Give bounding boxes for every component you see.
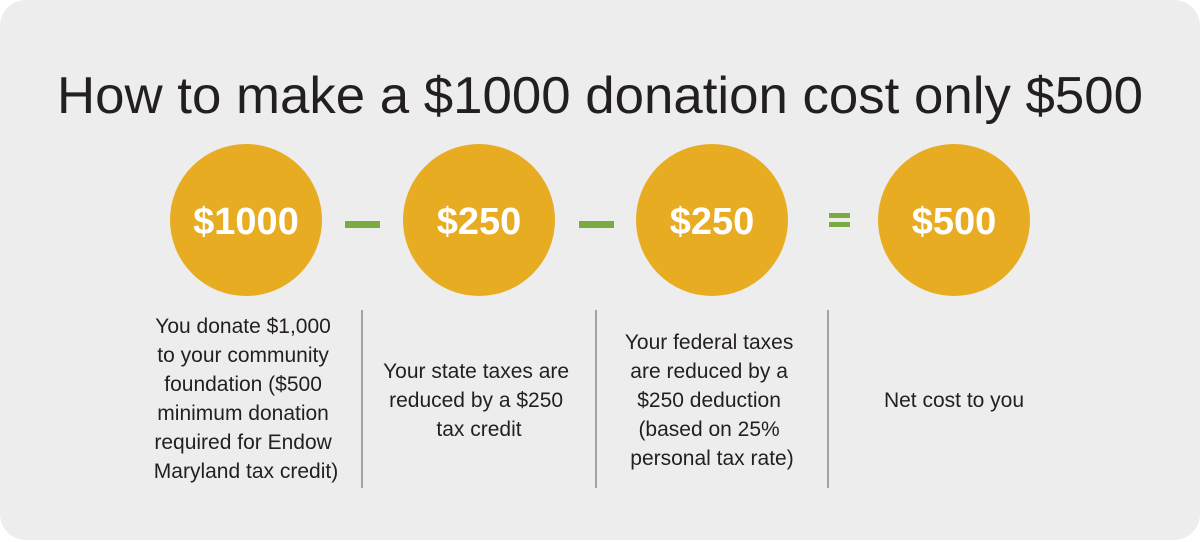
text: column 3: Your federal taxes: [625, 331, 793, 354]
text: column 1: minimum donation: [157, 402, 329, 425]
text: column 4: Net cost to you: [884, 389, 1024, 412]
text: column 3: (based on 25%: [638, 418, 780, 441]
title: How to make a $1000 donation cost only $500: [57, 67, 1143, 125]
operator: minus 2: [579, 221, 614, 228]
circle: $250 state: [403, 144, 555, 296]
circle: $1000: $1000: [193, 201, 299, 243]
text: column 3: are reduced by a: [630, 360, 788, 383]
operator: minus 1: [345, 221, 380, 228]
text: column 1: Maryland tax credit): [154, 460, 338, 483]
operator: equals: [829, 213, 850, 227]
text: column 1: foundation ($500: [164, 373, 322, 396]
text: column 1: You donate $1,000: [155, 315, 331, 338]
text: column 2: Your state taxes are: [383, 360, 569, 383]
circle: $250 federal: $250: [670, 201, 754, 243]
text: column 1: to your community: [157, 344, 329, 367]
text: column 1: required for Endow: [154, 431, 333, 454]
circle: $500: [878, 144, 1030, 296]
text: column 3: $250 deduction: [637, 389, 781, 412]
circle: $250 federal: [636, 144, 788, 296]
text: column 2: tax credit: [436, 418, 522, 441]
circle: $250 state: $250: [437, 201, 521, 243]
text: column 2: reduced by a $250: [389, 389, 563, 412]
text: column 3: personal tax rate): [630, 447, 794, 470]
circle: $1000: [170, 144, 322, 296]
circle: $500: $500: [912, 201, 996, 243]
